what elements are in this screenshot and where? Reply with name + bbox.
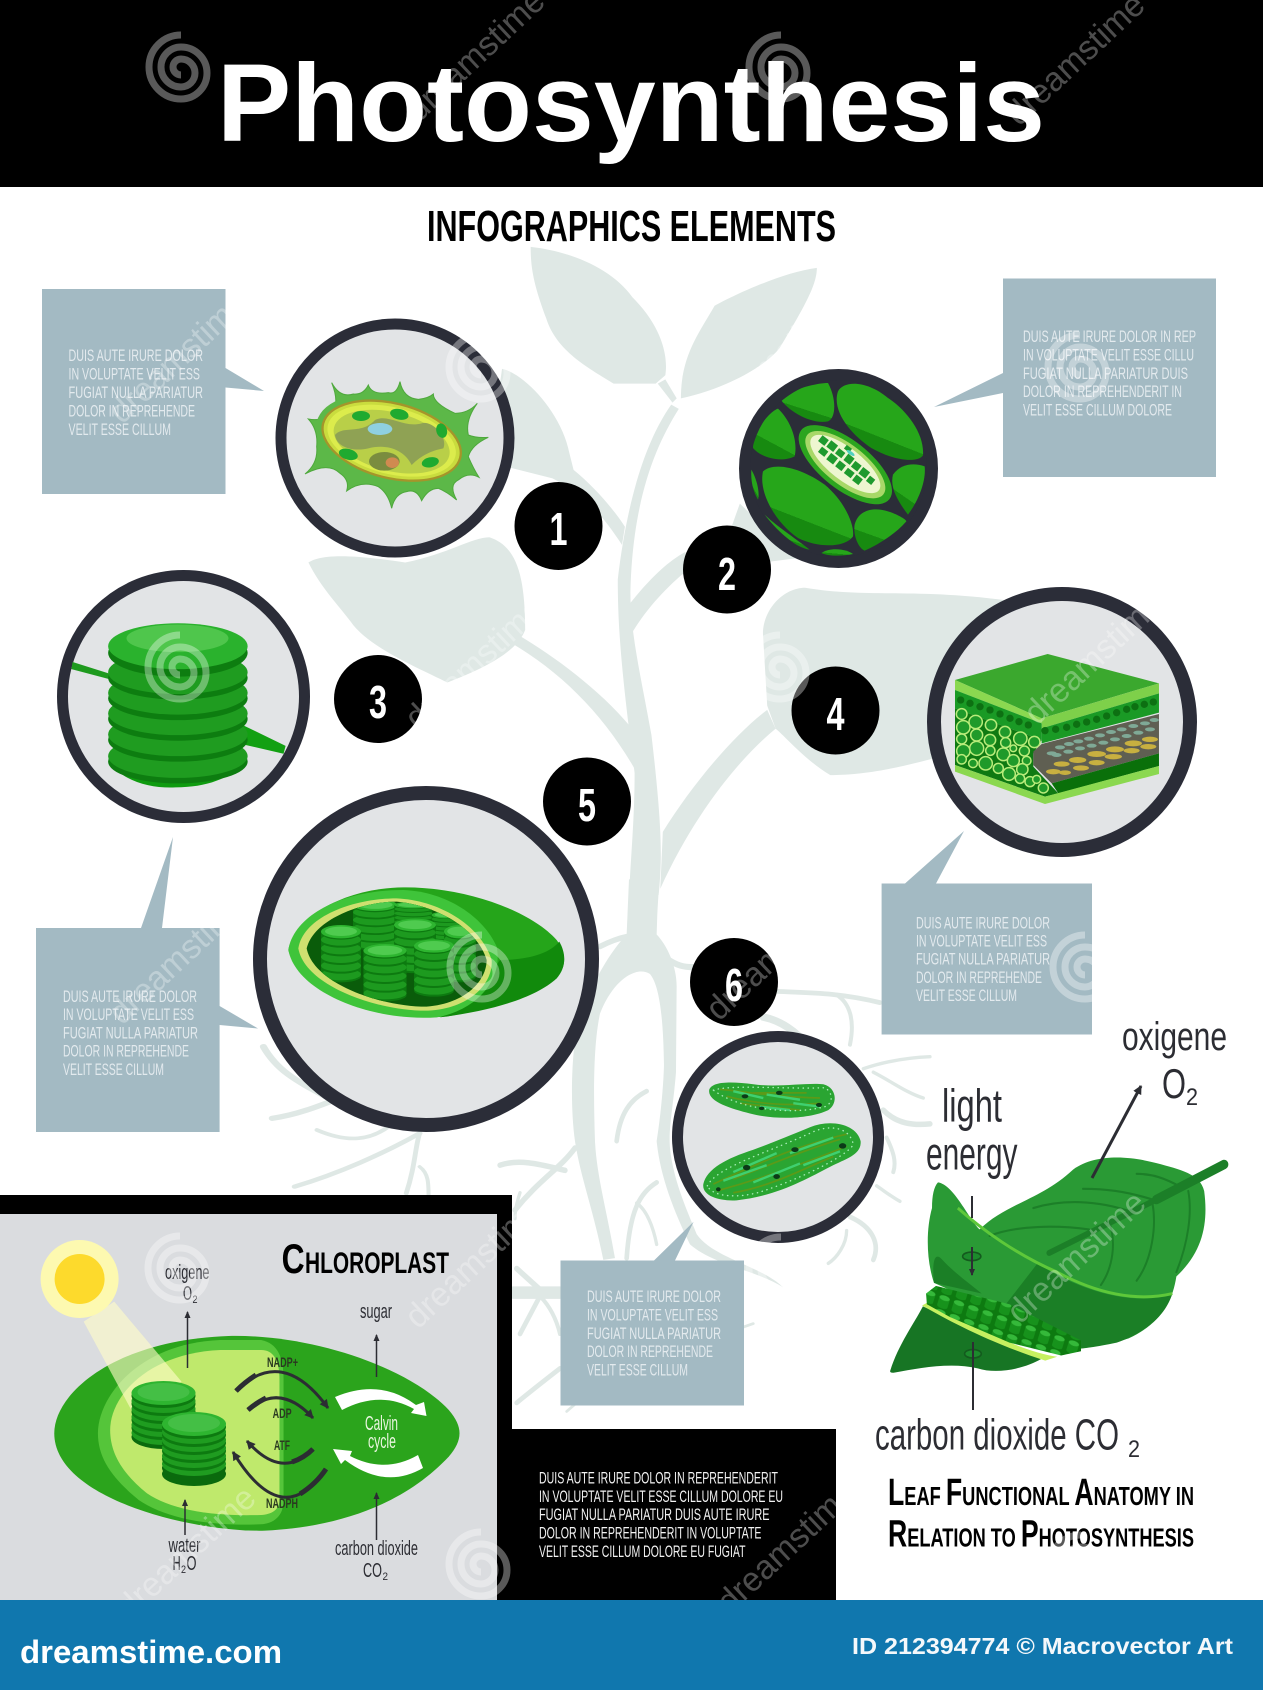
black panel text: DOLOR IN REPREHENDERIT IN VOLUPTATE bbox=[539, 1524, 762, 1542]
callout 2: FUGIAT NULLA PARIATUR DUIS bbox=[1023, 365, 1188, 383]
water input: H bbox=[173, 1553, 181, 1575]
plant silhouette bbox=[263, 247, 1007, 1411]
watermark text: dreamstime bbox=[1000, 1184, 1153, 1331]
sun bbox=[41, 1240, 119, 1318]
water input: water bbox=[168, 1535, 201, 1557]
watermark text: dreamstime bbox=[1017, 585, 1170, 732]
carbon dioxide input: 2 bbox=[382, 1571, 388, 1583]
callout 3: VELIT ESSE CILLUM bbox=[63, 1061, 164, 1079]
watermark text: dreamstime bbox=[398, 1189, 551, 1336]
cycle carrier labels: NADPH bbox=[266, 1495, 298, 1511]
water input bbox=[168, 1500, 201, 1576]
sugar output bbox=[360, 1301, 392, 1377]
number badge 6 bbox=[690, 938, 778, 1026]
footer brand: dreamstime.com bbox=[20, 1634, 282, 1670]
callout 1: IN VOLUPTATE VELIT ESS bbox=[68, 366, 200, 384]
carbon dioxide input: carbon dioxide bbox=[335, 1538, 418, 1560]
black bottom panel bbox=[0, 1195, 836, 1600]
callout 1: DUIS AUTE IRURE DOLOR bbox=[68, 347, 203, 365]
callout 2: DOLOR IN REPREHENDERIT IN bbox=[1023, 383, 1182, 401]
oxygen output: 2 bbox=[192, 1294, 198, 1306]
circle 2: leaf cells bbox=[744, 374, 932, 562]
number badge 1 bbox=[514, 482, 602, 570]
number badge 3 bbox=[334, 655, 422, 743]
number badge 6: 6 bbox=[725, 959, 743, 1011]
leaf anatomy heading bbox=[888, 1472, 1194, 1556]
chloroplast heading: C bbox=[282, 1235, 305, 1282]
callout 4: FUGIAT NULLA PARIATUR bbox=[916, 950, 1050, 968]
callout 3: DOLOR IN REPREHENDE bbox=[63, 1042, 189, 1060]
chloroplast heading: HLOROPLAST bbox=[305, 1247, 449, 1280]
black panel text: FUGIAT NULLA PARIATUR DUIS AUTE IRURE bbox=[539, 1506, 770, 1524]
calvin cycle label bbox=[365, 1413, 398, 1453]
label: carbon dioxide: 2 bbox=[1128, 1436, 1140, 1463]
callout 4 bbox=[882, 831, 1092, 1034]
callout 6: DOLOR IN REPREHENDE bbox=[587, 1343, 713, 1361]
number badge 3: 3 bbox=[369, 676, 387, 728]
number badge 2 bbox=[683, 526, 771, 614]
arrow: carbon dioxide bbox=[972, 1342, 974, 1410]
callout 6: DUIS AUTE IRURE DOLOR bbox=[587, 1288, 721, 1306]
callout 3 bbox=[36, 837, 258, 1132]
callout 6: FUGIAT NULLA PARIATUR bbox=[587, 1325, 721, 1343]
watermark text: dreamstime bbox=[102, 885, 255, 1032]
arrow: light to leaf bbox=[971, 1196, 973, 1275]
watermark text: dreamstime bbox=[110, 1479, 263, 1626]
cycle carrier labels: ADP bbox=[273, 1405, 292, 1421]
callout 3: DUIS AUTE IRURE DOLOR bbox=[63, 988, 197, 1006]
label: oxigene: oxigene bbox=[1122, 1015, 1227, 1059]
label: carbon dioxide bbox=[875, 1410, 1140, 1463]
oxygen output: oxigene bbox=[165, 1262, 210, 1284]
black panel text: IN VOLUPTATE VELIT ESSE CILLUM DOLORE EU bbox=[539, 1488, 783, 1506]
chloroplast heading bbox=[282, 1235, 449, 1282]
callout 1: VELIT ESSE CILLUM bbox=[68, 421, 171, 439]
circle 4: leaf cross-section bbox=[934, 594, 1190, 850]
leaf anatomy heading: LEAF FUNCTIONAL ANATOMY IN bbox=[888, 1472, 1194, 1514]
circle 5: chloroplast cutaway bbox=[260, 793, 592, 1125]
circle 1: plant cell bbox=[281, 324, 509, 552]
oxygen output bbox=[165, 1262, 210, 1368]
calvin cycle label: cycle bbox=[368, 1431, 396, 1453]
number badge 2: 2 bbox=[718, 548, 736, 600]
sugar output: sugar bbox=[360, 1301, 392, 1323]
label: light energy: energy bbox=[926, 1128, 1018, 1180]
label: oxigene: O bbox=[1162, 1060, 1186, 1107]
number badge 5 bbox=[543, 758, 631, 846]
watermark spirals bbox=[148, 35, 1111, 1599]
water input: O bbox=[186, 1553, 196, 1575]
header band bbox=[0, 0, 1263, 187]
oxygen output: O bbox=[183, 1283, 192, 1305]
water input: 2 bbox=[181, 1564, 186, 1576]
callout 3: FUGIAT NULLA PARIATUR bbox=[63, 1024, 198, 1042]
number badge 1: 1 bbox=[550, 503, 568, 555]
callout 4: DUIS AUTE IRURE DOLOR bbox=[916, 914, 1050, 932]
callout 4: DOLOR IN REPREHENDE bbox=[916, 969, 1042, 987]
number badge 4: 4 bbox=[826, 688, 845, 740]
chloroplast body bbox=[54, 1302, 460, 1531]
callout 6: IN VOLUPTATE VELIT ESS bbox=[587, 1306, 718, 1324]
black panel text bbox=[539, 1470, 783, 1561]
cycle carrier labels bbox=[266, 1354, 298, 1511]
cycle carrier labels: ATF bbox=[274, 1437, 290, 1453]
watermark text: dreamstime bbox=[398, 590, 551, 737]
leaf illustration bbox=[890, 1158, 1224, 1373]
label: oxigene: 2 bbox=[1186, 1084, 1198, 1111]
black panel text: DUIS AUTE IRURE DOLOR IN REPREHENDERIT bbox=[539, 1470, 778, 1488]
watermark text: dreamstime bbox=[710, 1474, 863, 1621]
watermark text: dreamstime bbox=[697, 288, 850, 435]
chloroplast panel bbox=[0, 1214, 497, 1600]
subtitle: INFOGRAPHICS ELEMENTS bbox=[427, 202, 836, 251]
carbon dioxide input: CO bbox=[363, 1560, 382, 1582]
cycle carrier labels: NADP+ bbox=[267, 1354, 298, 1370]
number badge 4 bbox=[792, 666, 880, 754]
callout 6: VELIT ESSE CILLUM bbox=[587, 1362, 688, 1380]
leaf anatomy heading: RELATION TO PHOTOSYNTHESIS bbox=[888, 1514, 1194, 1556]
arrow: oxygen out bbox=[1092, 1086, 1141, 1178]
callout 1: FUGIAT NULLA PARIATUR bbox=[68, 384, 203, 402]
callout 2 bbox=[934, 278, 1216, 477]
callout 1: DOLOR IN REPREHENDE bbox=[68, 402, 195, 420]
watermark text: dreamstime bbox=[699, 881, 852, 1028]
footer bar bbox=[0, 1600, 1263, 1690]
footer image id: ID 212394774 © Macrovector Art bbox=[852, 1633, 1233, 1659]
callout 4: IN VOLUPTATE VELIT ESS bbox=[916, 932, 1047, 950]
circle 6: chloroplasts bbox=[678, 1036, 878, 1238]
calvin cycle label: Calvin bbox=[365, 1413, 398, 1435]
label: light energy bbox=[926, 1080, 1018, 1180]
circle 3: granum stack bbox=[62, 576, 304, 818]
calvin cycle arrows bbox=[333, 1389, 426, 1477]
black panel text: VELIT ESSE CILLUM DOLORE EU FUGIAT bbox=[539, 1543, 746, 1561]
title: Photosynthesis bbox=[217, 42, 1045, 165]
carbon dioxide input bbox=[335, 1493, 418, 1583]
label: oxigene bbox=[1122, 1015, 1227, 1111]
callout 3: IN VOLUPTATE VELIT ESS bbox=[63, 1006, 194, 1024]
watermark text: dreamstime bbox=[102, 284, 255, 431]
callout 1 bbox=[42, 289, 264, 494]
electron carrier arrows bbox=[233, 1372, 328, 1497]
thylakoid stacks bbox=[132, 1381, 226, 1486]
number badge 5: 5 bbox=[578, 779, 596, 831]
callout 2: VELIT ESSE CILLUM DOLORE bbox=[1023, 402, 1172, 420]
callout 6 bbox=[560, 1222, 744, 1406]
label: carbon dioxide: carbon dioxide CO bbox=[875, 1410, 1119, 1460]
callout 4: VELIT ESSE CILLUM bbox=[916, 987, 1017, 1005]
label: light energy: light bbox=[942, 1080, 1002, 1132]
